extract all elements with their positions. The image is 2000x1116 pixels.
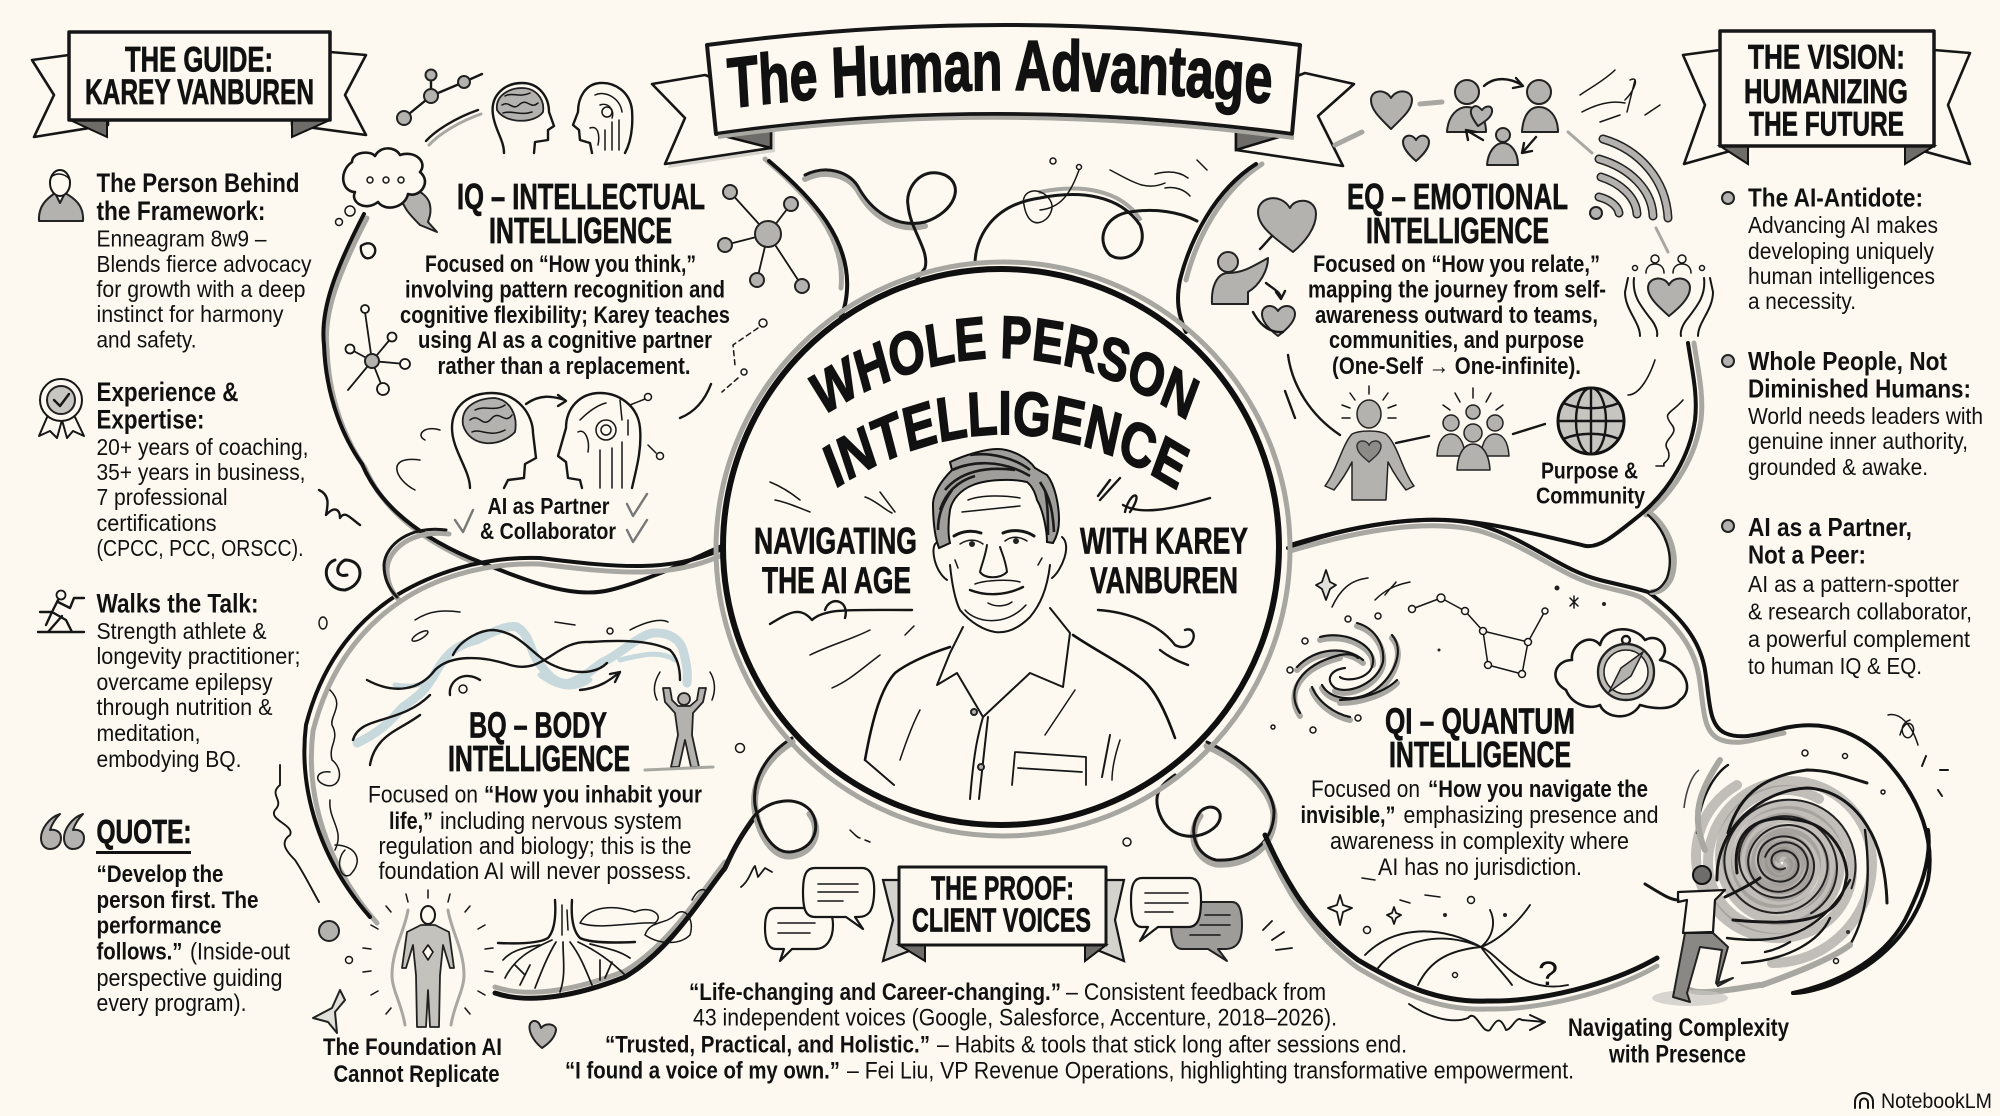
text: the person behind the framework: instinct for harmony (96, 301, 284, 327)
text: EQ description: awareness outward to teams, (1315, 302, 1598, 329)
heading: EQ (1347, 176, 1568, 251)
item: whole people: Diminished Humans: (1748, 374, 1971, 404)
label: the foundation (323, 1034, 502, 1088)
text: BQ description: life,” (389, 808, 433, 835)
subheading left (754, 520, 917, 601)
item: the AI-antidote (1722, 182, 1938, 314)
item: AI as a partner: Not a Peer: (1748, 540, 1866, 570)
text: BQ description: foundation AI will never possess. (378, 858, 692, 885)
label: AI as partner: & Collaborator (480, 518, 616, 544)
banner: the guide: KAREY VANBUREN (85, 73, 314, 112)
icon: AI head (573, 83, 632, 153)
icon: stars and quantum lines: ? (1538, 955, 1558, 993)
text: client testimonials: – Habits & tools that stick long after sessions end. (937, 1032, 1407, 1058)
banner: the guide (32, 32, 366, 137)
label: navigating complexity (1568, 1014, 1789, 1068)
text: client testimonials (565, 979, 1574, 1084)
icon: network small (346, 305, 410, 395)
icon: constellation (1408, 586, 1606, 678)
portrait (865, 449, 1175, 799)
banner: the vision (1683, 31, 1970, 164)
text: the person behind the framework: Enneagram 8w9 – (96, 226, 267, 252)
label: purpose and community: Community (1536, 482, 1645, 508)
item: whole people: Whole People, Not (1748, 346, 1947, 376)
subheading right: WITH KAREY (1080, 520, 1248, 562)
item: AI as a partner: AI as a pattern-spotter (1748, 571, 1959, 597)
icon: dashed path (722, 319, 767, 392)
text: QI description (1300, 776, 1658, 881)
text: QI description: “How you navigate the (1428, 776, 1648, 803)
text: quote (96, 813, 290, 1017)
item: whole people: grounded & awake. (1748, 454, 1928, 480)
icon: energy waves (353, 611, 687, 765)
item: the AI-antidote: developing uniquely (1748, 238, 1934, 264)
central circle (714, 260, 1292, 838)
text: the person behind the framework: Blends fierce advocacy (96, 251, 312, 277)
banner: the proof: CLIENT VOICES (912, 902, 1091, 938)
icon: compass in cloud (1555, 629, 1687, 716)
text: quote: person first. The (96, 887, 258, 914)
text: BQ description: “How you inhabit your (484, 782, 702, 808)
text: walks the talk: Strength athlete & (96, 618, 266, 644)
subheading left: NAVIGATING (754, 520, 917, 562)
text: quote: (Inside-out (190, 938, 290, 966)
icon: galaxy (1271, 570, 1410, 733)
decoration: squiggle (319, 490, 360, 590)
icon: glowing human figure (363, 890, 493, 1027)
text: the person behind the framework: and safety. (96, 326, 196, 352)
central heading (807, 316, 1200, 490)
banner: the vision: HUMANIZING (1744, 73, 1908, 111)
panel: BQ (274, 611, 714, 1088)
icon: thought bubble (336, 148, 437, 232)
icon: network large (718, 185, 809, 293)
text: walks the talk: Walks the Talk: (96, 588, 258, 618)
text: quote: performance (96, 912, 222, 940)
text: IQ description: cognitive flexibility; Karey teaches (400, 302, 730, 329)
panel: EQ (1212, 70, 1713, 508)
icon: person facing vortex (1645, 752, 1929, 1006)
text: walks the talk: meditation, (96, 720, 200, 746)
label: the foundation: The Foundation AI (323, 1034, 502, 1061)
text: QI description: invisible,” (1300, 802, 1396, 829)
item: the AI-antidote: The AI-Antidote: (1748, 182, 1923, 212)
icon: hands holding heart (1625, 255, 1713, 336)
label: AI as partner: AI as Partner (488, 493, 610, 519)
item: AI as a partner (1722, 512, 1972, 679)
text: walks the talk (96, 588, 300, 772)
decorations around proof (736, 744, 1292, 950)
decorations around vortex (1802, 715, 1948, 964)
text: IQ description: using AI as a cognitive partner (418, 327, 712, 354)
text: client testimonials: – Consistent feedback from (1066, 979, 1326, 1006)
heading: BQ: INTELLIGENCE (448, 738, 630, 779)
arrow: wavy (1409, 1004, 1545, 1031)
heading: IQ (457, 176, 705, 251)
heading: BQ (448, 704, 630, 779)
icon: figure with raised arms (645, 672, 714, 770)
banner: the vision: THE FUTURE (1749, 106, 1904, 144)
icon: molecule chain (397, 70, 482, 125)
text: quote: perspective guiding (96, 965, 282, 992)
text: IQ description: involving pattern recognition and (405, 276, 725, 304)
item: whole people: World needs leaders with (1748, 403, 1983, 429)
heading: EQ: INTELLIGENCE (1366, 210, 1549, 251)
text: EQ description: (One-Self → One-infinite). (1332, 353, 1581, 380)
panel: the guide (32, 32, 366, 1017)
text: experience and expertise: (CPCC, PCC, ORSCC). (96, 535, 304, 561)
text: experience and expertise: 7 professional (96, 484, 228, 510)
heading: QI: INTELLIGENCE (1389, 734, 1571, 775)
text: client testimonials: “I found a voice of my own.” (565, 1058, 840, 1084)
icon: globe (1558, 388, 1624, 454)
title banner (650, 23, 1356, 168)
text: QI description: emphasizing presence and (1404, 802, 1658, 829)
text: the person behind the framework (96, 168, 312, 352)
label: purpose and community: Purpose & (1541, 458, 1638, 484)
banner: the vision: THE VISION: (1748, 38, 1905, 76)
heading: BQ: BQ – BODY (469, 704, 607, 746)
text: QI description: awareness in complexity where (1330, 828, 1629, 855)
item: AI as a partner: & research collaborator, (1748, 598, 1972, 624)
text: BQ description: including nervous system (440, 808, 682, 835)
icon: AI as partner illustration (397, 393, 664, 490)
item: whole people: genuine inner authority, (1748, 428, 1968, 454)
banner: the proof (883, 867, 1124, 961)
text: quote: follows.” (96, 938, 182, 966)
text: IQ description: Focused on “How you think,” (425, 251, 696, 278)
panel: QI (1271, 570, 1948, 1068)
panel: the proof (565, 744, 1574, 1084)
decorations around BQ (274, 617, 556, 1048)
icons: connected hearts and people (1335, 70, 1660, 165)
text: client testimonials: “Trusted, Practical, and Holistic.” (605, 1032, 930, 1058)
text: EQ description: mapping the journey from self- (1308, 276, 1606, 304)
heading: EQ: EQ – EMOTIONAL (1347, 176, 1568, 217)
icon: quotation marks (41, 814, 84, 849)
item: AI as a partner: a powerful complement (1748, 626, 1971, 652)
icon: person (39, 170, 83, 221)
panel: IQ (319, 70, 809, 590)
item: AI as a partner: to human IQ & EQ. (1748, 653, 1922, 679)
text: experience and expertise: 20+ years of coaching, (96, 434, 308, 460)
text: client testimonials: “Life-changing and Career-changing.” (689, 979, 1061, 1006)
item: AI as a partner: AI as a Partner, (1748, 512, 1912, 542)
central heading: WHOLE PERSON (807, 316, 1200, 420)
text: client testimonials: – Fei Liu, VP Revenue Operations, highlighting transformative empowerment. (847, 1058, 1574, 1084)
text: experience and expertise: Expertise: (96, 404, 204, 434)
banner: the proof: THE PROOF: (931, 870, 1074, 906)
text: walks the talk: overcame epilepsy (96, 669, 273, 695)
text: walks the talk: through nutrition & (96, 694, 272, 720)
central heading: INTELLIGENCE (822, 390, 1190, 490)
panel: the vision (1683, 31, 1983, 679)
text: the person behind the framework: for growth with a deep (96, 276, 306, 302)
connecting mind-map curves (304, 110, 1930, 1009)
subheading right (1080, 520, 1248, 601)
icon: human head with brain (493, 83, 554, 153)
item: whole people (1722, 346, 1983, 480)
text: experience and expertise: 35+ years in business, (96, 459, 306, 485)
text: experience and expertise: Experience & (96, 377, 238, 407)
icon: stars and quantum lines (1328, 878, 1568, 993)
text: quote: every program). (96, 990, 246, 1017)
text: QI description: Focused on (1311, 776, 1420, 803)
decoration: squiggle (1628, 360, 1683, 466)
heading: IQ: INTELLIGENCE (489, 210, 672, 251)
text: walks the talk: embodying BQ. (96, 746, 242, 772)
logo: NotebookLM: NotebookLM (1881, 1090, 1992, 1113)
heading: QI (1385, 700, 1575, 775)
text: BQ description: Focused on (368, 782, 478, 808)
text: quote: “Develop the (96, 861, 224, 888)
subheading left: THE AI AGE (762, 560, 911, 601)
item: the AI-antidote: a necessity. (1748, 288, 1856, 314)
label: the foundation: Cannot Replicate (334, 1061, 500, 1088)
label: navigating complexity: Navigating Complexity (1568, 1014, 1789, 1042)
banner: the guide: THE GUIDE: (125, 40, 273, 80)
icon: group (1437, 388, 1509, 470)
item: the AI-antidote: human intelligences (1748, 263, 1935, 289)
icon: signal arcs (1568, 132, 1668, 252)
icon: body with heart (1285, 386, 1545, 500)
text: the person behind the framework: The Person Behind (96, 168, 300, 198)
text: experience and expertise (96, 377, 308, 561)
subheading right: VANBUREN (1090, 560, 1238, 601)
icon: athlete (38, 590, 84, 632)
label: AI as partner (480, 493, 616, 544)
text: quote: QUOTE: (96, 813, 192, 850)
vortex swirl (1666, 752, 1876, 968)
icon: heart and self (1212, 198, 1316, 336)
text: QI description: AI has no jurisdiction. (1378, 854, 1582, 881)
text: IQ description (400, 251, 730, 380)
heading: IQ: IQ – INTELLECTUAL (457, 176, 705, 217)
text: BQ description: regulation and biology; this is the (378, 833, 692, 860)
icon: tree roots (498, 890, 708, 992)
text: EQ description: Focused on “How you relate,” (1313, 251, 1600, 278)
text: client testimonials: 43 independent voices (Google, Salesforce, Accenture, 2018–2026). (693, 1004, 1337, 1032)
icons: chat bubbles left (765, 868, 874, 961)
motion lines around portrait (770, 478, 1210, 688)
icons: check marks (455, 494, 647, 542)
text: walks the talk: longevity practitioner; (96, 643, 300, 669)
heading: QI: QI – QUANTUM (1385, 700, 1575, 742)
label: purpose and community (1536, 458, 1645, 508)
text: EQ description (1308, 251, 1606, 380)
label: navigating complexity: with Presence (1608, 1040, 1746, 1068)
title text: The Human Advantage (726, 38, 1272, 116)
text: experience and expertise: certifications (96, 510, 216, 536)
icon: badge (39, 379, 84, 438)
icons: chat bubbles right (1131, 878, 1242, 961)
item: the AI-antidote: Advancing AI makes (1748, 212, 1938, 238)
text: IQ description: rather than a replacement. (438, 353, 690, 380)
text: the person behind the framework: the Framework: (96, 196, 266, 226)
text: BQ description (368, 782, 702, 885)
text: EQ description: communities, and purpose (1329, 327, 1584, 354)
